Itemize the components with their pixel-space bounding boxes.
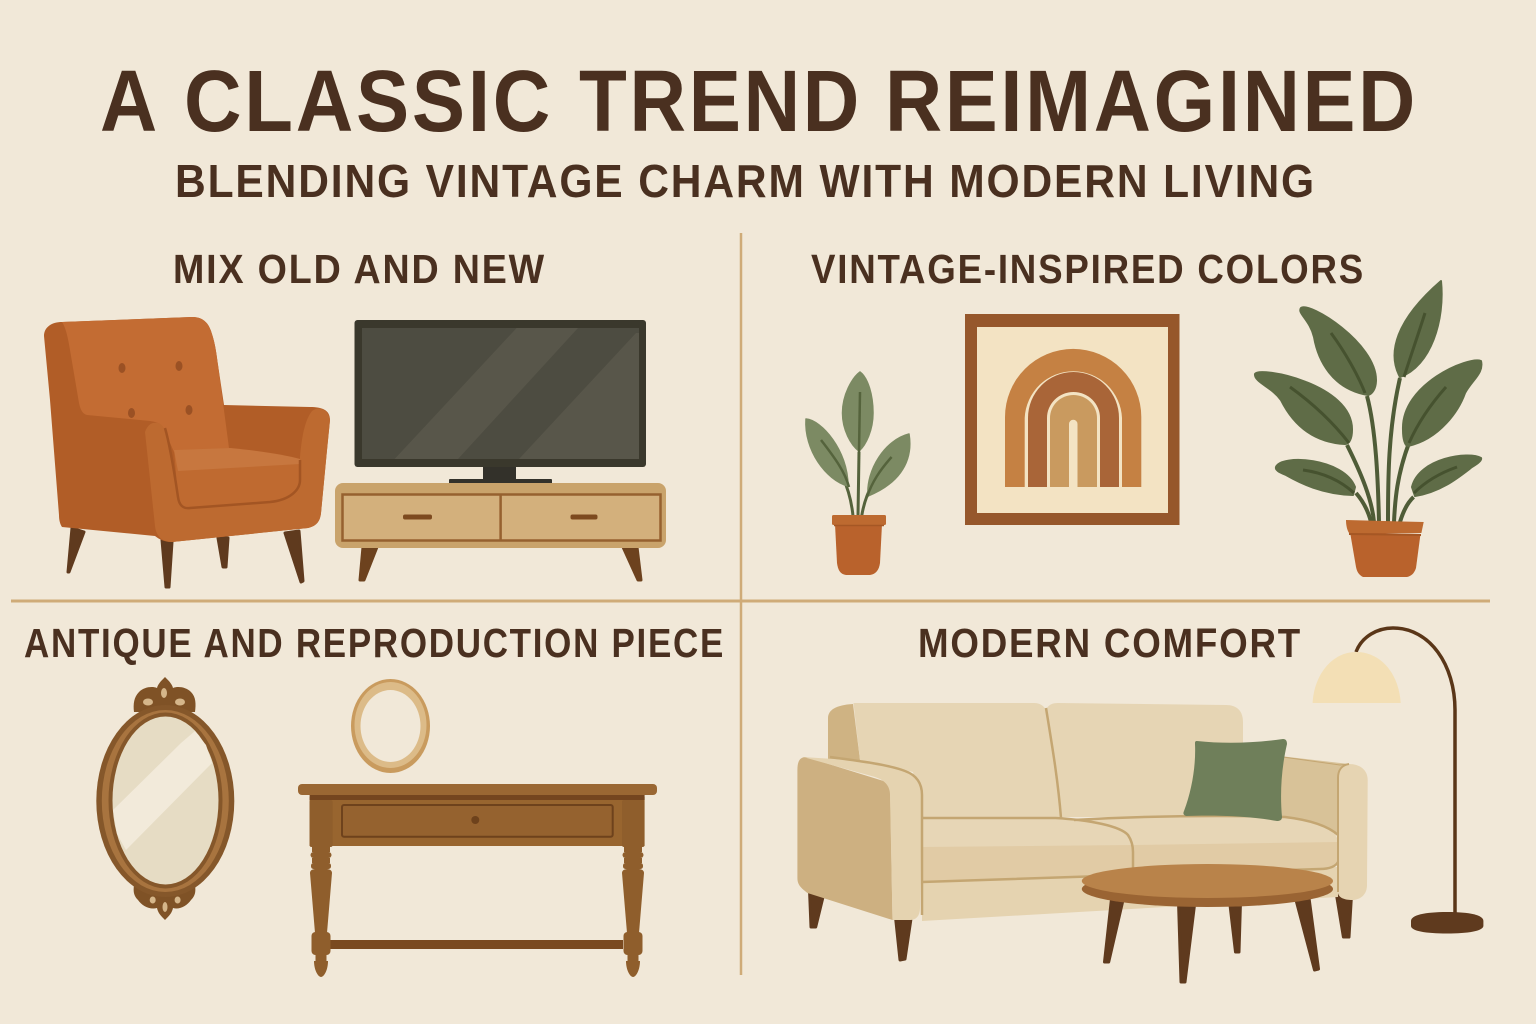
panel: antique and reproduction piece	[24, 620, 725, 977]
icon: beige sofa	[797, 703, 1368, 960]
title: REIMAGINED	[885, 53, 1418, 150]
icon: ornate oval mirror	[96, 677, 234, 920]
title: A	[100, 53, 157, 150]
title: CLASSIC	[184, 53, 553, 150]
icon: wooden tv console	[335, 483, 666, 580]
heading: modern comfort: MODERN COMFORT	[918, 620, 1302, 666]
subtitle: BLENDING VINTAGE CHARM WITH MODERN LIVING	[175, 155, 1316, 207]
icon: antique wooden console table	[298, 784, 657, 977]
panel: vintage-inspired colors	[806, 246, 1481, 577]
heading: antique and reproduction piece: ANTIQUE AND REPRODUCTION PIECE	[24, 620, 725, 666]
panel: mix old and new	[44, 246, 666, 587]
icon: green throw pillow	[1183, 739, 1287, 821]
icon: orange armchair	[44, 317, 330, 587]
panel: modern comfort	[797, 620, 1483, 982]
icon: arc floor lamp	[1313, 628, 1483, 934]
icon: framed arch art	[965, 314, 1180, 525]
icon: round wooden coffee table	[1082, 864, 1333, 982]
icon: large potted plant	[1255, 281, 1481, 577]
icon: small oval frame	[351, 679, 430, 773]
heading: mix old and new: MIX OLD AND NEW	[173, 246, 546, 292]
icon: small potted plant	[806, 372, 910, 575]
icon: flat-screen tv	[354, 320, 646, 485]
heading: vintage-inspired colors: VINTAGE-INSPIRED COLORS	[811, 246, 1365, 292]
title: TREND	[579, 53, 862, 150]
